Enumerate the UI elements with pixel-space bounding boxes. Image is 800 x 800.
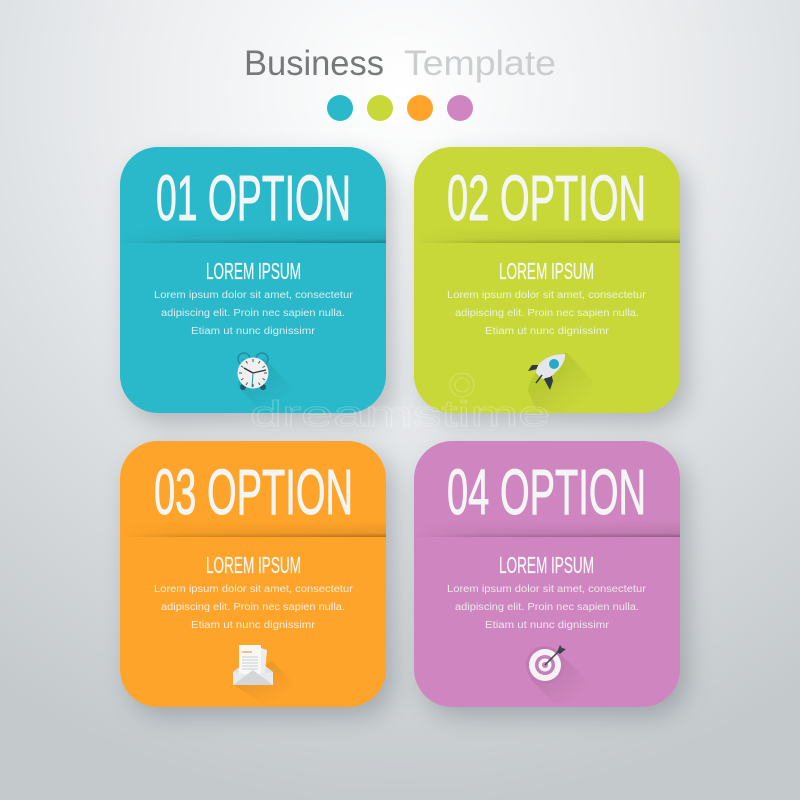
- body text: Lorem ipsum dolor sit amet, consectetur: [447, 584, 647, 595]
- subheading: LOREM IPSUM: [499, 258, 594, 284]
- heading: 03 option: 03 OPTION: [154, 456, 353, 528]
- panel: 03 option: [120, 441, 394, 717]
- icon: envelope: [233, 645, 286, 698]
- watermark: [250, 373, 550, 434]
- subheading: LOREM IPSUM: [206, 258, 301, 284]
- title: Business: [244, 44, 384, 83]
- body text: [447, 584, 647, 631]
- heading: 04 option: 04 OPTION: [447, 456, 646, 528]
- icon: target with arrow: [526, 645, 576, 694]
- panel: 02 option: [414, 147, 688, 423]
- body text: Lorem ipsum dolor sit amet, consectetur: [447, 290, 647, 301]
- body text: Etiam ut nunc dignissimr: [191, 326, 316, 337]
- body text: adipiscing elit. Proin nec sapien nulla.: [161, 308, 345, 319]
- colour dots: [327, 95, 473, 121]
- watermark: dreamstime: [250, 393, 550, 434]
- panel: 04 option: [414, 441, 688, 717]
- body text: adipiscing elit. Proin nec sapien nulla.: [455, 308, 639, 319]
- heading: 01 option: 01 OPTION: [156, 162, 351, 234]
- body text: Etiam ut nunc dignissimr: [191, 620, 316, 631]
- body text: [447, 290, 647, 337]
- body text: adipiscing elit. Proin nec sapien nulla.: [161, 602, 345, 613]
- icon: alarm clock: [237, 352, 280, 400]
- title: Template: [404, 44, 556, 83]
- panel: 01 option: [120, 147, 394, 423]
- title: [244, 44, 556, 83]
- body text: [154, 290, 354, 337]
- subheading: LOREM IPSUM: [206, 552, 301, 578]
- body text: Lorem ipsum dolor sit amet, consectetur: [154, 584, 354, 595]
- body text: adipiscing elit. Proin nec sapien nulla.: [455, 602, 639, 613]
- body text: [154, 584, 354, 631]
- body text: Etiam ut nunc dignissimr: [485, 326, 610, 337]
- subheading: LOREM IPSUM: [499, 552, 594, 578]
- icon: rocket: [528, 353, 582, 410]
- heading: 02 option: 02 OPTION: [447, 162, 646, 234]
- body text: Lorem ipsum dolor sit amet, consectetur: [154, 290, 354, 301]
- body text: Etiam ut nunc dignissimr: [485, 620, 610, 631]
